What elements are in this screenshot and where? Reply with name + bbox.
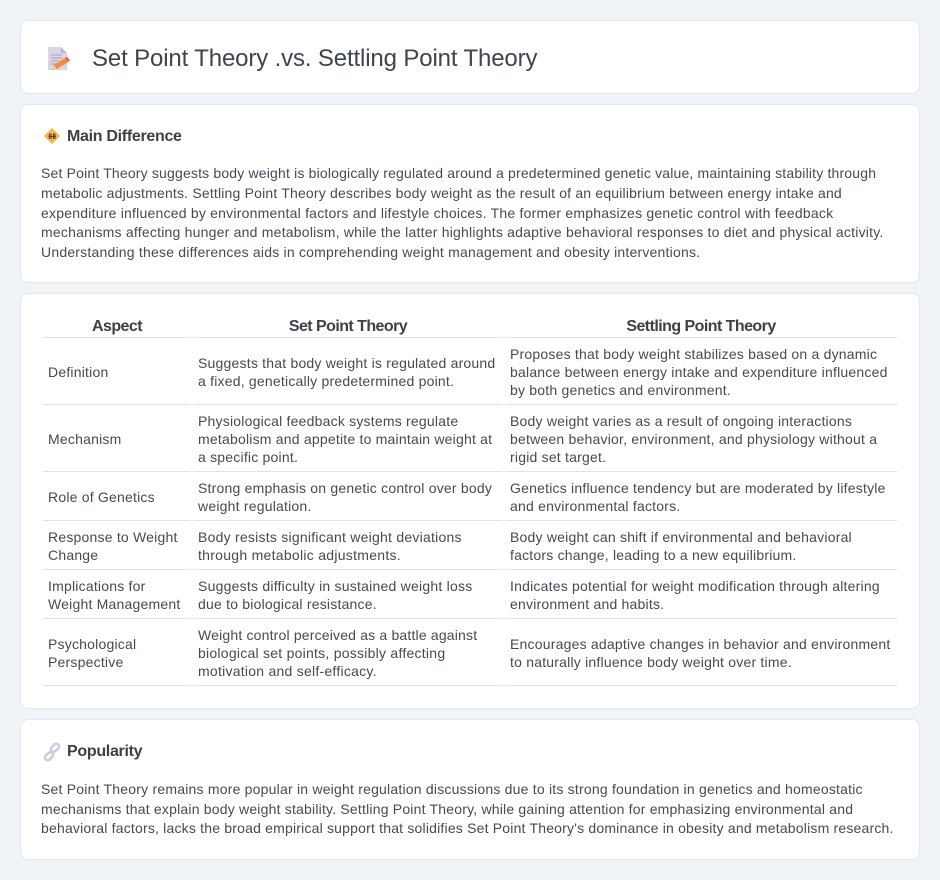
- row: implications for weight management: due to biological resistance.: [198, 596, 377, 612]
- row: mechanism: Mechanism: [48, 431, 121, 447]
- row: definition: Definition: [48, 364, 108, 380]
- row: definition: balance between energy intake and expenditure influenced: [510, 364, 888, 380]
- panel: comparison table: [20, 293, 920, 709]
- row: implications for weight management: Implications for: [48, 578, 146, 594]
- row: implications for weight management: Indicates potential for weight modification through altering: [510, 578, 880, 594]
- heading: main difference: Main Difference: [67, 128, 182, 145]
- row: psychological perspective: motivation and self-efficacy.: [198, 663, 377, 679]
- table header: set point theory: Set Point Theory: [289, 318, 407, 335]
- row: mechanism: metabolism and appetite to maintain weight at: [198, 431, 492, 447]
- row: psychological perspective: Encourages adaptive changes in behavior and environment: [510, 636, 890, 652]
- icon: chain link: [44, 742, 60, 762]
- title: Set Point Theory .vs. Settling Point Theory: [92, 45, 537, 72]
- text block: main difference: expenditure influenced by environmental factors and lifestyle choices. The former emphasizes genetic control with feedback: [41, 205, 833, 221]
- row: response to weight change: through metabolic adjustments.: [198, 547, 401, 563]
- row: response to weight change: Body resists significant weight deviations: [198, 529, 462, 545]
- row: response to weight change: Response to Weight: [48, 529, 178, 545]
- row: role of genetics: Genetics influence tendency but are moderated by lifestyle: [510, 480, 886, 496]
- row: response to weight change: Change: [48, 547, 98, 563]
- row: role of genetics: and environmental factors.: [510, 498, 680, 514]
- row: mechanism: Physiological feedback systems regulate: [198, 413, 458, 429]
- icon: document with pencil: [48, 47, 70, 70]
- heading: popularity: Popularity: [67, 743, 142, 760]
- table header: aspect: Aspect: [92, 318, 142, 335]
- row: definition: by both genetics and environment.: [510, 382, 731, 398]
- row: psychological perspective: Psychological: [48, 636, 136, 652]
- row: role of genetics: Strong emphasis on genetic control over body: [198, 480, 492, 496]
- text block: popularity: behavioral factors, lacks the broad empirical support that solidifies Set Point Theory's dominance in obesity and metabolism research.: [41, 820, 894, 836]
- row: implications for weight management: Weight Management: [48, 596, 180, 612]
- row: definition: Suggests that body weight is regulated around: [198, 355, 495, 371]
- text block: main difference: Set Point Theory suggests body weight is biologically regulated around a predetermined genetic value, maintaining stability through: [41, 165, 876, 181]
- text block: main difference: mechanisms affecting hunger and metabolism, while the latter highlights adaptive behavioral responses to diet and physical activity.: [41, 224, 884, 240]
- row: psychological perspective: to naturally influence body weight over time.: [510, 654, 792, 670]
- row: definition: Proposes that body weight stabilizes based on a dynamic: [510, 346, 877, 362]
- row: mechanism: rigid set target.: [510, 449, 606, 465]
- text block: main difference: Understanding these differences aids in comprehending weight management and obesity interventions.: [41, 244, 700, 260]
- panel: popularity: [20, 719, 920, 860]
- row: psychological perspective: Perspective: [48, 654, 123, 670]
- row: psychological perspective: biological set points, possibly affecting: [198, 645, 445, 661]
- row: response to weight change: Body weight can shift if environmental and behavioral: [510, 529, 852, 545]
- text block: popularity: mechanisms that explain body weight stability. Settling Point Theory, while gaining attention for emphasizing environmental and: [41, 801, 853, 817]
- row: psychological perspective: Weight control perceived as a battle against: [198, 627, 477, 643]
- row: mechanism: Body weight varies as a result of ongoing interactions: [510, 413, 852, 429]
- row: role of genetics: weight regulation.: [198, 498, 312, 514]
- row: response to weight change: factors change, leading to a new equilibrium.: [510, 547, 797, 563]
- icon: diamond sign: [44, 128, 60, 144]
- text block: main difference: metabolic adjustments. Settling Point Theory describes body weight as the result of an equilibrium between energy intake and: [41, 185, 842, 201]
- row: implications for weight management: environment and habits.: [510, 596, 664, 612]
- table header: settling point theory: Settling Point Theory: [626, 318, 776, 335]
- row: implications for weight management: Suggests difficulty in sustained weight loss: [198, 578, 472, 594]
- row: mechanism: between behavior, environment, and physiology without a: [510, 431, 877, 447]
- row: role of genetics: Role of Genetics: [48, 489, 155, 505]
- header card: [20, 20, 920, 94]
- row: mechanism: a specific point.: [198, 449, 298, 465]
- panel: main difference: [20, 104, 920, 283]
- row: definition: a fixed, genetically predetermined point.: [198, 373, 454, 389]
- text block: popularity: Set Point Theory remains more popular in weight regulation discussions due to its strong foundation in genetics and homeostatic: [41, 781, 863, 797]
